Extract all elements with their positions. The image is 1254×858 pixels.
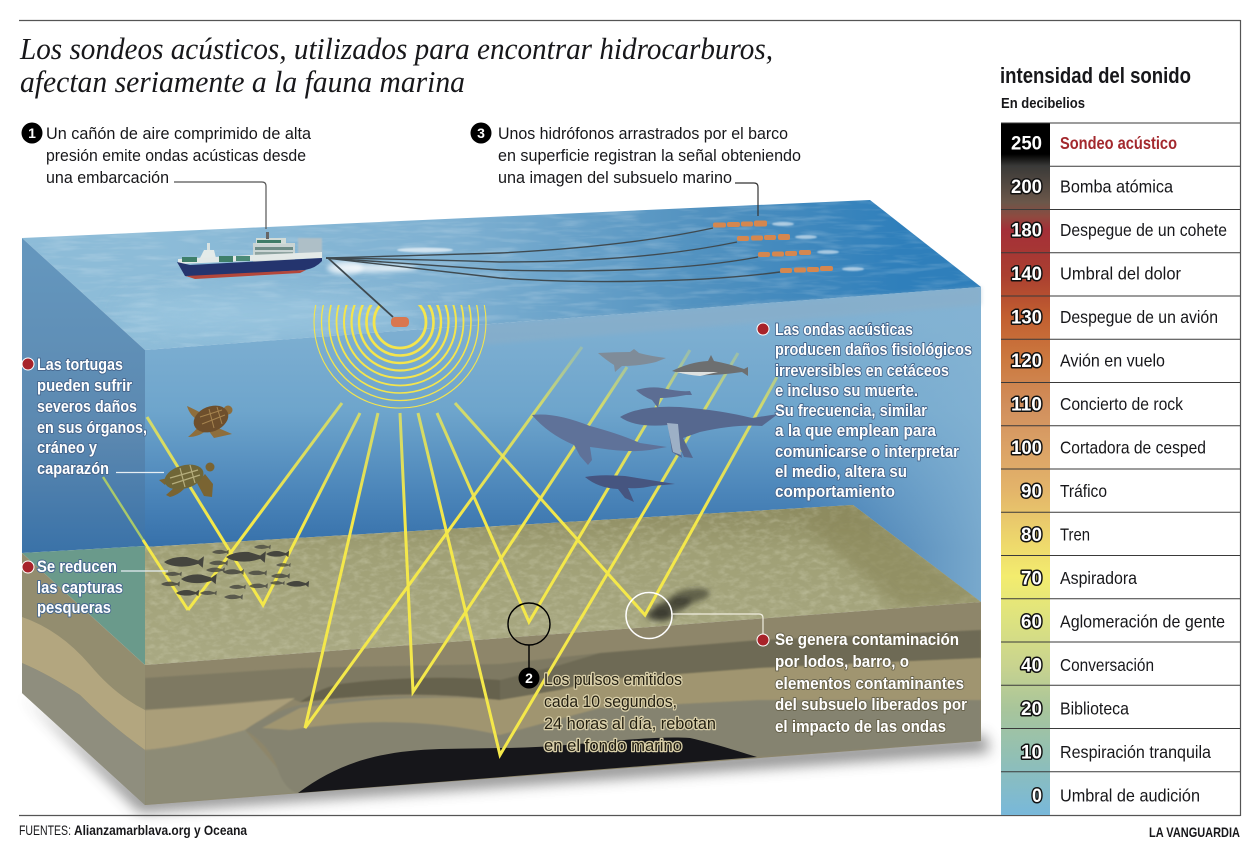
decibel values: 20 bbox=[1021, 699, 1042, 720]
callout: cetaceans bbox=[757, 320, 972, 501]
contamination text: del subsuelo liberados por bbox=[775, 695, 967, 714]
text 3: en superficie registran la señal obteniendo bbox=[498, 146, 801, 165]
air gun buoy bbox=[391, 317, 409, 327]
callout: contamination bbox=[626, 592, 967, 736]
badge 1: 1 bbox=[28, 125, 36, 141]
title: Los sondeos acústicos, utilizados para encontrar hidrocarburos, bbox=[19, 31, 773, 66]
turtles bbox=[159, 401, 232, 497]
decibel values: 110 bbox=[1011, 394, 1042, 416]
text 2: 24 horas al día, rebotan bbox=[544, 714, 716, 733]
sound source labels: Conversación bbox=[1060, 655, 1154, 675]
callout 2 bbox=[508, 603, 716, 755]
decibel values: 90 bbox=[1021, 482, 1042, 502]
decibel values: 180 bbox=[1011, 220, 1042, 242]
decibel values: 100 bbox=[1011, 438, 1042, 459]
leader 3 bbox=[735, 183, 758, 216]
dot bbox=[757, 323, 769, 335]
sound source labels: Biblioteca bbox=[1060, 698, 1129, 718]
text 2: en el fondo marino bbox=[544, 736, 682, 755]
waterline bbox=[186, 270, 306, 279]
sea surface bbox=[20, 198, 985, 353]
callout 3 bbox=[470, 122, 801, 216]
hull bbox=[177, 258, 322, 277]
dolphin right bbox=[672, 355, 748, 376]
sources: FUENTES: bbox=[19, 822, 71, 838]
decibel values: 130 bbox=[1011, 308, 1042, 328]
cetaceans text: e incluso su muerte. bbox=[775, 381, 918, 400]
turtles text: severos daños bbox=[37, 397, 137, 416]
whale left bbox=[532, 414, 667, 465]
cetaceans bbox=[532, 349, 778, 502]
sound wave rings bbox=[313, 305, 487, 408]
title: afectan seriamente a la fauna marina bbox=[20, 64, 465, 99]
dolphin left bbox=[598, 349, 666, 372]
seabed bbox=[145, 503, 990, 668]
cetaceans text: producen daños fisiológicos bbox=[775, 340, 972, 359]
sound source labels: Sondeo acústico bbox=[1060, 133, 1177, 153]
connector bbox=[528, 645, 530, 668]
cetaceans text: Su frecuencia, similar bbox=[775, 401, 927, 420]
sound source labels: Avión en vuelo bbox=[1060, 350, 1165, 370]
block shadow bbox=[24, 696, 990, 812]
title bbox=[19, 31, 773, 99]
black ring bbox=[508, 603, 550, 645]
text 3: una imagen del subsuelo marino bbox=[498, 168, 732, 187]
text 1: presión emite ondas acústicas desde bbox=[46, 146, 306, 165]
fishing text: las capturas bbox=[37, 578, 123, 597]
sound source labels: Aglomeración de gente bbox=[1060, 612, 1225, 632]
water front face bbox=[145, 287, 981, 602]
cetaceans text: comunicarse o interpretar bbox=[775, 442, 959, 461]
tow cables bbox=[326, 228, 780, 317]
decibel values: 70 bbox=[1021, 568, 1042, 590]
hydrophone streamers bbox=[713, 220, 833, 273]
decibel values: 10 bbox=[1021, 742, 1042, 764]
scale subheading: En decibelios bbox=[1001, 95, 1085, 112]
turtles text: pueden sufrir bbox=[37, 376, 132, 395]
turtles text: en sus órganos, bbox=[37, 418, 147, 437]
badge 3: 3 bbox=[477, 125, 485, 141]
turtle upper bbox=[187, 401, 232, 438]
callout 1 bbox=[22, 122, 312, 229]
turtles leader bbox=[116, 472, 164, 474]
contamination text: por lodos, barro, o bbox=[775, 652, 909, 671]
leader 1 bbox=[174, 182, 266, 229]
survey ship bbox=[177, 232, 322, 279]
turtles text: caparazón bbox=[37, 459, 109, 478]
dot bbox=[22, 561, 34, 573]
text 2 bbox=[544, 670, 716, 755]
sound source labels: Despegue de un avión bbox=[1060, 307, 1218, 327]
cetaceans text bbox=[775, 320, 972, 501]
subsoil front layers bbox=[145, 602, 981, 805]
text 1 bbox=[46, 124, 312, 187]
badge 3 bbox=[470, 122, 492, 144]
scale heading: intensidad del sonido bbox=[1000, 63, 1191, 88]
decibel values: 200 bbox=[1011, 177, 1042, 198]
yellow sound rays bbox=[103, 347, 777, 755]
contamination text bbox=[775, 630, 967, 736]
contamination text: elementos contaminantes bbox=[775, 674, 964, 693]
cetaceans text: a la que emplean para bbox=[775, 421, 936, 440]
decibel values: 80 bbox=[1021, 525, 1042, 546]
sound source labels: Cortadora de cesped bbox=[1060, 438, 1206, 458]
panel: sound intensity scale bbox=[1000, 63, 1240, 815]
text 2: cada 10 segundos, bbox=[544, 692, 677, 711]
dot bbox=[22, 358, 34, 370]
oil stain bbox=[647, 586, 711, 621]
decibel values: 60 bbox=[1021, 612, 1042, 633]
badge 1 bbox=[22, 122, 42, 144]
sound source labels: Umbral de audición bbox=[1060, 786, 1200, 806]
decibel values: 250 bbox=[1011, 134, 1042, 154]
sound source labels: Tren bbox=[1060, 524, 1090, 544]
turtles text: cráneo y bbox=[37, 438, 97, 457]
badge 2: 2 bbox=[525, 670, 533, 686]
contamination text: Se genera contaminación bbox=[775, 630, 959, 649]
sound source labels: Umbral del dolor bbox=[1060, 264, 1181, 284]
cetaceans text: el medio, altera su bbox=[775, 462, 907, 481]
text 1: Un cañón de aire comprimido de alta bbox=[46, 124, 312, 143]
text 3: Unos hidrófonos arrastrados por el barco bbox=[498, 124, 788, 143]
superstructure bbox=[178, 232, 322, 264]
cetaceans text: irreversibles en cetáceos bbox=[775, 361, 949, 380]
sound source labels: Concierto de rock bbox=[1060, 394, 1183, 414]
fishing text: pesqueras bbox=[37, 598, 111, 617]
callout: turtles bbox=[22, 355, 164, 478]
decibel values: 0 bbox=[1032, 786, 1042, 807]
sound source labels bbox=[1060, 133, 1227, 806]
sound source labels: Bomba atómica bbox=[1060, 176, 1173, 196]
left wall bbox=[22, 238, 145, 805]
white ring bbox=[626, 592, 672, 638]
text 2: Los pulsos emitidos bbox=[544, 670, 682, 689]
turtle lower bbox=[159, 460, 214, 497]
contamination text: el impacto de las ondas bbox=[775, 717, 946, 736]
decibel values bbox=[1011, 134, 1042, 807]
turtles text: Las tortugas bbox=[37, 355, 123, 374]
whale bottom bbox=[585, 475, 675, 502]
callout: fishing bbox=[22, 557, 168, 617]
text 3 bbox=[498, 124, 801, 187]
sound source labels: Aspiradora bbox=[1060, 568, 1137, 588]
turtles text bbox=[37, 355, 147, 478]
text 1: una embarcación bbox=[46, 168, 169, 187]
decibel values: 40 bbox=[1021, 656, 1042, 676]
sound source labels: Tráfico bbox=[1060, 481, 1107, 501]
decibel values: 140 bbox=[1011, 264, 1042, 285]
badge 2 bbox=[518, 668, 540, 688]
cetaceans text: Las ondas acústicas bbox=[775, 320, 913, 339]
sound source labels: Despegue de un cohete bbox=[1060, 220, 1227, 240]
dot bbox=[757, 634, 769, 646]
ocean block diagram bbox=[20, 198, 990, 805]
cetaceans text: comportamiento bbox=[775, 482, 895, 501]
small whale bbox=[636, 387, 692, 408]
sound source labels: Respiración tranquila bbox=[1060, 742, 1211, 762]
fish school bbox=[161, 545, 309, 600]
fishing leader bbox=[121, 570, 168, 572]
colour bar bbox=[1001, 123, 1050, 815]
fishing text bbox=[37, 557, 123, 617]
fishing text: Se reducen bbox=[37, 557, 117, 576]
sources: Alianzamarblava.org y Oceana bbox=[74, 822, 247, 838]
sources bbox=[19, 822, 247, 838]
decibel values: 120 bbox=[1011, 351, 1042, 372]
whale right bbox=[620, 407, 778, 458]
contamination leader bbox=[672, 614, 763, 635]
